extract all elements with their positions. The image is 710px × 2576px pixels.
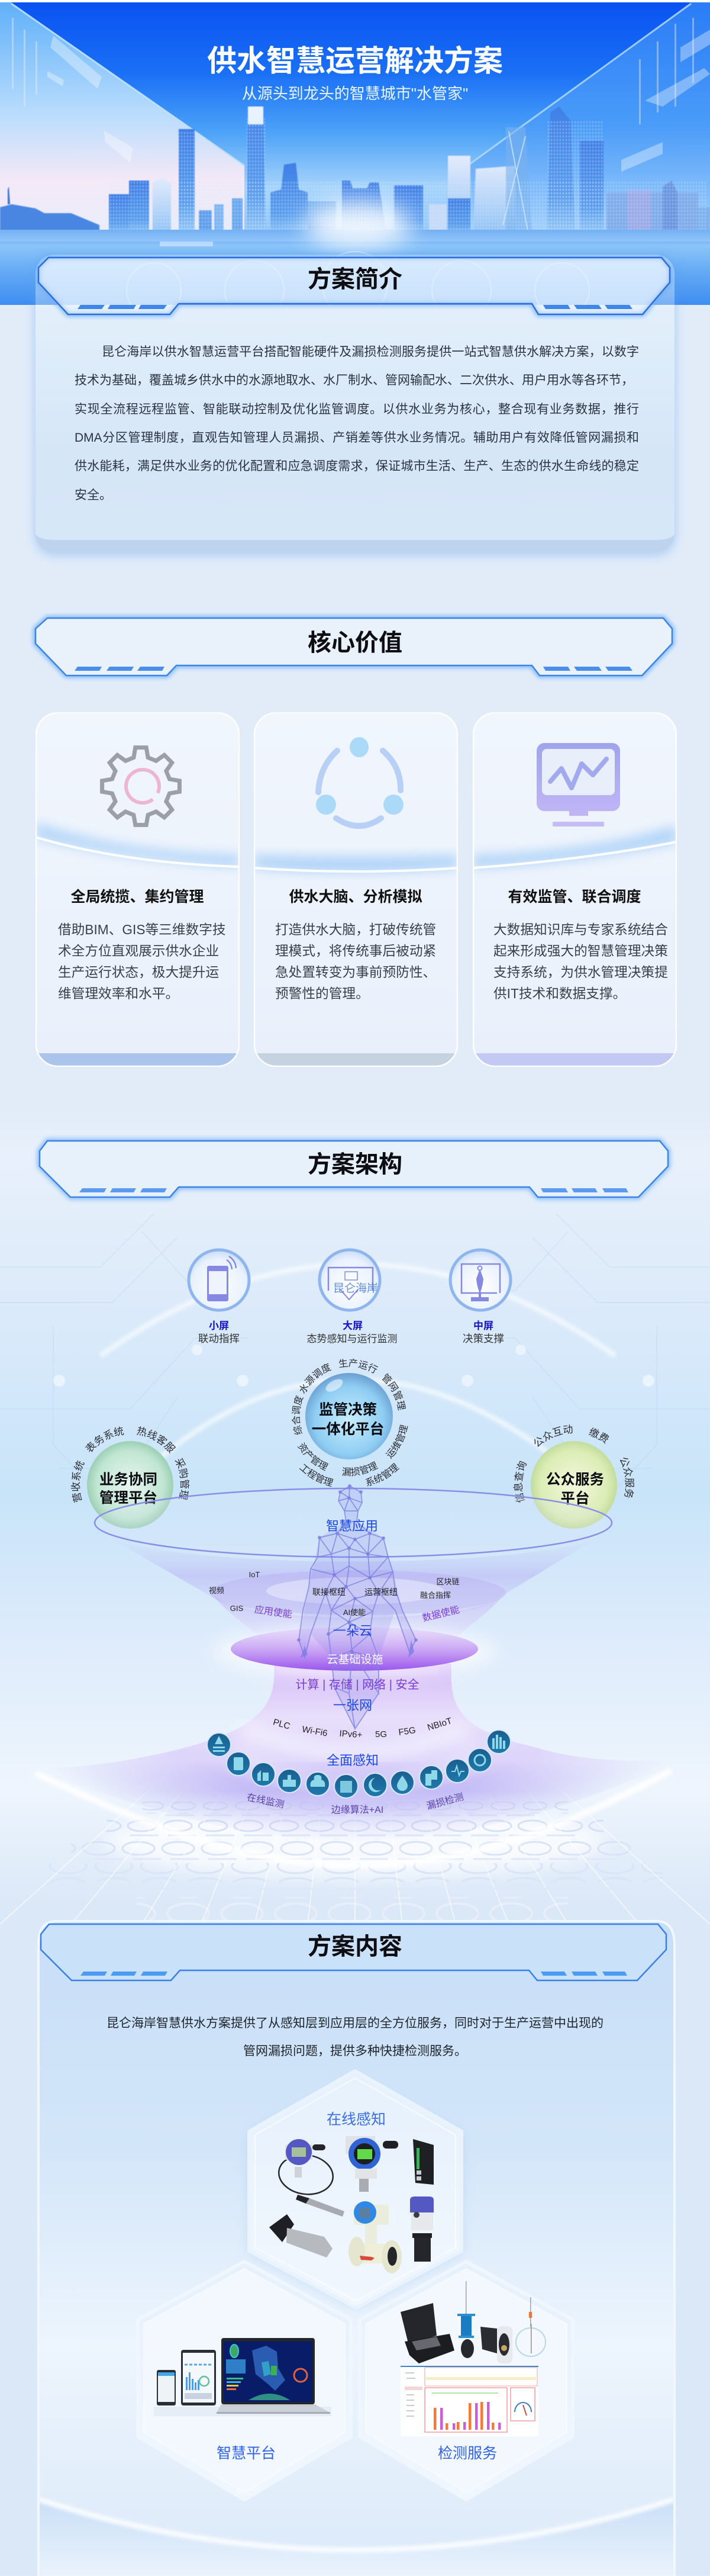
panel: core value card 3 <box>473 712 677 1067</box>
funnel: enablement layer <box>210 1570 506 1675</box>
hero subtitle: 从源头到龙头的智慧城市"水管家" <box>242 85 468 102</box>
funnel: smart application layer <box>95 1488 612 1620</box>
section header: core value: 核心价值 <box>308 630 402 656</box>
layer labels: Wi-Fi6 <box>301 1724 328 1739</box>
text block: solution intro: 实现全流程远程监管、智能联动控制及优化监管调度。以供水业务为核心，整合现有业务数据，推行 <box>75 403 639 416</box>
icon: small screen: 联动指挥 <box>198 1333 240 1345</box>
layer labels: 智慧应用 <box>326 1519 378 1533</box>
sensing labels <box>246 1792 465 1815</box>
image: analysis dashboard <box>401 2366 538 2436</box>
hexagon: smart platform <box>138 2262 351 2500</box>
layer labels: 云基础设施 <box>327 1653 383 1666</box>
sensing labels: 边缘算法+AI <box>331 1804 383 1815</box>
image: phones and laptop <box>154 2338 331 2416</box>
label: testing service: 检测服务 <box>438 2445 497 2462</box>
panel: core value card 3: 供IT技术和数据支撑。 <box>493 986 626 1001</box>
public service platform sphere: 缴费 <box>588 1427 609 1443</box>
panel: core value card 1: 全局统揽、集约管理 <box>70 889 204 905</box>
panel: core value card 1: 维管理效率和水平。 <box>58 986 179 1001</box>
figure: mesh human <box>299 1486 416 1729</box>
business collaboration platform sphere: 热线客服 <box>136 1426 176 1453</box>
layer labels: 区块链 <box>436 1577 460 1586</box>
hexagon: online sensing <box>249 2071 462 2308</box>
layer labels: IoT <box>249 1570 260 1579</box>
sensing labels: 漏损检测 <box>425 1792 465 1812</box>
layer labels: PLC <box>272 1717 291 1732</box>
business collaboration platform sphere <box>71 1426 189 1529</box>
text block: content intro <box>106 2017 604 2058</box>
text block: content intro: 管网漏损问题，提供多种快捷检测服务。 <box>243 2044 467 2058</box>
panel: core value card 2: 预警性的管理。 <box>275 986 369 1001</box>
layer labels: 运营枢纽 <box>364 1587 398 1597</box>
layer labels: F5G <box>398 1725 417 1738</box>
layer labels: 一朵云 <box>333 1623 372 1638</box>
layer labels: AI使能 <box>343 1608 366 1617</box>
public service platform sphere: 公众服务 <box>546 1471 604 1488</box>
icon: three connected nodes <box>316 737 404 826</box>
chart: architecture diagram <box>0 1248 710 1924</box>
panel: core value card 1 <box>36 712 240 1067</box>
layer labels: 联接枢纽 <box>312 1587 346 1597</box>
panel: core value card 2: 打造供水大脑，打破传统管 <box>275 922 436 937</box>
panel: core value card 3: 大数据知识库与专家系统结合 <box>493 922 668 937</box>
binary floor <box>0 1705 710 1924</box>
label: online sensing: 在线感知 <box>327 2111 386 2128</box>
panel: core value card 3: 支持系统，为供水管理决策提 <box>493 964 668 980</box>
supervision decision platform sphere: 运维管理 <box>385 1424 408 1459</box>
text block: solution intro: 安全。 <box>75 488 112 502</box>
panel: core value card 3: 起来形成强大的智慧管理决策 <box>493 943 668 959</box>
text block: solution intro: DMA分区管理制度，直观告知管理人员漏损、产销差等供水业务情况。辅助用户有效降低管网漏损和 <box>75 431 639 445</box>
label: smart platform: 智慧平台 <box>217 2445 276 2462</box>
large screen label: 大屏 <box>343 1320 363 1332</box>
section header: core value <box>30 613 677 681</box>
layer labels <box>209 1519 460 1768</box>
panel: core value card 2 <box>254 712 458 1067</box>
business collaboration platform sphere: 管理平台 <box>99 1489 157 1506</box>
supervision decision platform sphere: 监管决策 <box>319 1401 377 1418</box>
public service platform sphere: 信息查询 <box>514 1461 527 1503</box>
panel: core value card 1: 生产运行状态，极大提升运 <box>58 964 219 980</box>
panel: core value card 2: 理模式，将传统事后被动紧 <box>275 943 436 959</box>
section header: architecture <box>34 1136 673 1202</box>
layer labels: 数据使能 <box>421 1604 460 1623</box>
layer labels: NBIoT <box>426 1716 453 1733</box>
medium screen label: 中屏 <box>473 1320 493 1332</box>
text block: solution intro <box>75 345 639 502</box>
panel: solution intro card <box>36 255 674 552</box>
layer labels: 计算 | 存储 | 网络 | 安全 <box>296 1678 419 1691</box>
panel: core value card 1: 术全方位直观展示供水企业 <box>58 943 219 959</box>
business collaboration platform sphere: 表务系统 <box>85 1426 124 1452</box>
public service platform sphere: 平台 <box>561 1490 589 1507</box>
cloud infrastructure plate <box>212 1625 496 1678</box>
section header: solution content: 方案内容 <box>308 1934 402 1960</box>
small screen label: 小屏 <box>209 1320 229 1332</box>
supervision decision platform sphere: 系统管理 <box>366 1462 400 1486</box>
hexagon: testing service <box>360 2262 573 2500</box>
section header: architecture: 方案架构 <box>308 1152 402 1178</box>
icon: medium screen: 决策支撑 <box>463 1333 504 1345</box>
section header: solution intro: 方案简介 <box>308 266 402 292</box>
sensing labels: 在线监测 <box>246 1792 285 1810</box>
flared neck of the funnel <box>80 1664 632 1835</box>
section header: solution content <box>41 1924 666 1980</box>
icon: large screen: 态势感知与运行监测 <box>306 1333 398 1345</box>
supervision decision platform sphere <box>291 1358 408 1487</box>
icon ring: perception sensors <box>207 1730 511 1798</box>
image: leak detection kit <box>401 2281 546 2363</box>
supervision decision platform sphere: 一体化平台 <box>312 1420 384 1437</box>
supervision decision platform sphere: 生产运行 <box>338 1358 378 1374</box>
layer labels: 应用使能 <box>254 1604 293 1620</box>
hero title: 供水智慧运营解决方案 <box>207 44 503 78</box>
supervision decision platform sphere: 综合调度 <box>291 1395 304 1435</box>
business collaboration platform sphere: 采购管理 <box>175 1458 189 1500</box>
supervision decision platform sphere: 资产管理 <box>297 1442 328 1471</box>
icon: medium screen <box>450 1250 511 1345</box>
section header: solution intro <box>36 252 674 320</box>
hero banner with city skyline <box>0 0 710 305</box>
layer labels: 融合指挥 <box>420 1591 451 1600</box>
text block: solution intro: 供水能耗，满足供水业务的优化配置和应急调度需求，保证城市生活、生产、生态的供水生命线的稳定 <box>75 459 639 473</box>
icon: small screen <box>189 1250 249 1345</box>
icon: monitor with chart line <box>537 743 620 826</box>
icon: large screen: 昆仑海岸 <box>333 1282 378 1295</box>
panel: core value card 3: 有效监管、联合调度 <box>508 889 641 905</box>
business collaboration platform sphere: 营收系统 <box>71 1460 85 1503</box>
image: sensor products <box>269 2136 434 2273</box>
public service platform sphere: 公众互动 <box>534 1424 573 1447</box>
text block: solution intro: 昆仑海岸以供水智慧运营平台搭配智能硬件及漏损检测服务提供一站式智慧供水解决方案，以数字 <box>102 345 639 359</box>
public service platform sphere <box>514 1424 634 1529</box>
business collaboration platform sphere: 业务协同 <box>99 1471 157 1488</box>
layer labels: 视频 <box>209 1586 224 1595</box>
layer labels: 5G <box>375 1729 387 1739</box>
layer labels: GIS <box>230 1604 244 1613</box>
icon: large screen <box>306 1250 398 1345</box>
supervision decision platform sphere: 漏损管理 <box>342 1461 379 1477</box>
panel: core value card 1: 借助BIM、GIS等三维数字技 <box>58 922 226 937</box>
supervision decision platform sphere: 工程管理 <box>299 1464 334 1487</box>
panel: solution content card <box>37 1920 676 2576</box>
layer labels: IPv6+ <box>339 1729 363 1740</box>
panel: core value card 2: 急处置转变为事前预防性、 <box>275 964 436 980</box>
supervision decision platform sphere: 水源调度 <box>299 1363 331 1394</box>
icon: gear <box>102 748 179 825</box>
layer labels: 全面感知 <box>327 1753 379 1768</box>
panel: core value card 2: 供水大脑、分析模拟 <box>289 889 422 905</box>
public service platform sphere: 公众服务 <box>620 1458 634 1498</box>
layer labels: 一张网 <box>333 1698 372 1713</box>
supervision decision platform sphere: 管网管理 <box>382 1374 406 1410</box>
text block: solution intro: 技术为基础，覆盖城乡供水中的水源地取水、水厂制水、管网输配水、二次供水、用户用水等各环节， <box>75 374 634 387</box>
text block: content intro: 昆仑海岸智慧供水方案提供了从感知层到应用层的全方位服务，同时对于生产运营中出现的 <box>106 2017 604 2030</box>
